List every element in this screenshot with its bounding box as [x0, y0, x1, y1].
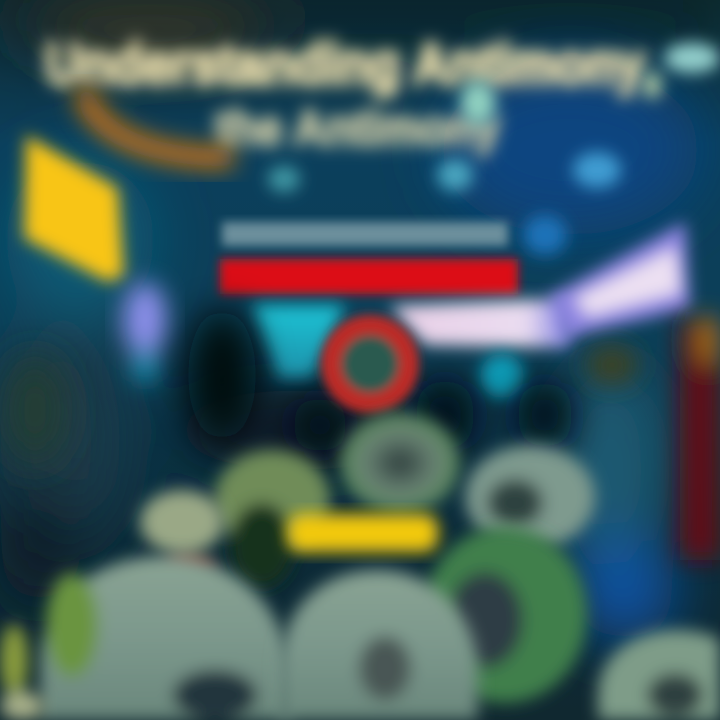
sphere bottom left edge	[0, 624, 44, 720]
sphere small left	[140, 490, 224, 574]
yellow bar	[288, 514, 438, 552]
sphere large centre	[280, 570, 478, 720]
sphere right mid	[423, 527, 587, 703]
small glowing dots	[268, 152, 621, 255]
sphere large left	[40, 556, 290, 720]
green spheres	[0, 413, 720, 720]
title second line: the Antimony	[215, 100, 500, 156]
red ring circle	[331, 325, 409, 403]
cyan glow patches	[252, 305, 524, 398]
white purple band: lower	[390, 298, 570, 348]
grey heading bar	[222, 222, 508, 246]
orange swoosh	[85, 98, 225, 158]
sphere bottom right	[598, 630, 720, 720]
title: Understanding Antimony	[45, 32, 645, 97]
bright title accents	[460, 43, 720, 125]
sphere back left	[214, 450, 330, 587]
sphere far back centre	[340, 413, 460, 513]
blue purple glow left	[123, 282, 167, 383]
sphere far back right	[465, 445, 595, 549]
dark right figure	[586, 314, 720, 560]
white purple band: right	[550, 222, 690, 338]
red bar	[220, 259, 518, 294]
title	[45, 32, 645, 156]
yellow panel	[24, 135, 124, 282]
dark silhouettes	[3, 309, 573, 465]
